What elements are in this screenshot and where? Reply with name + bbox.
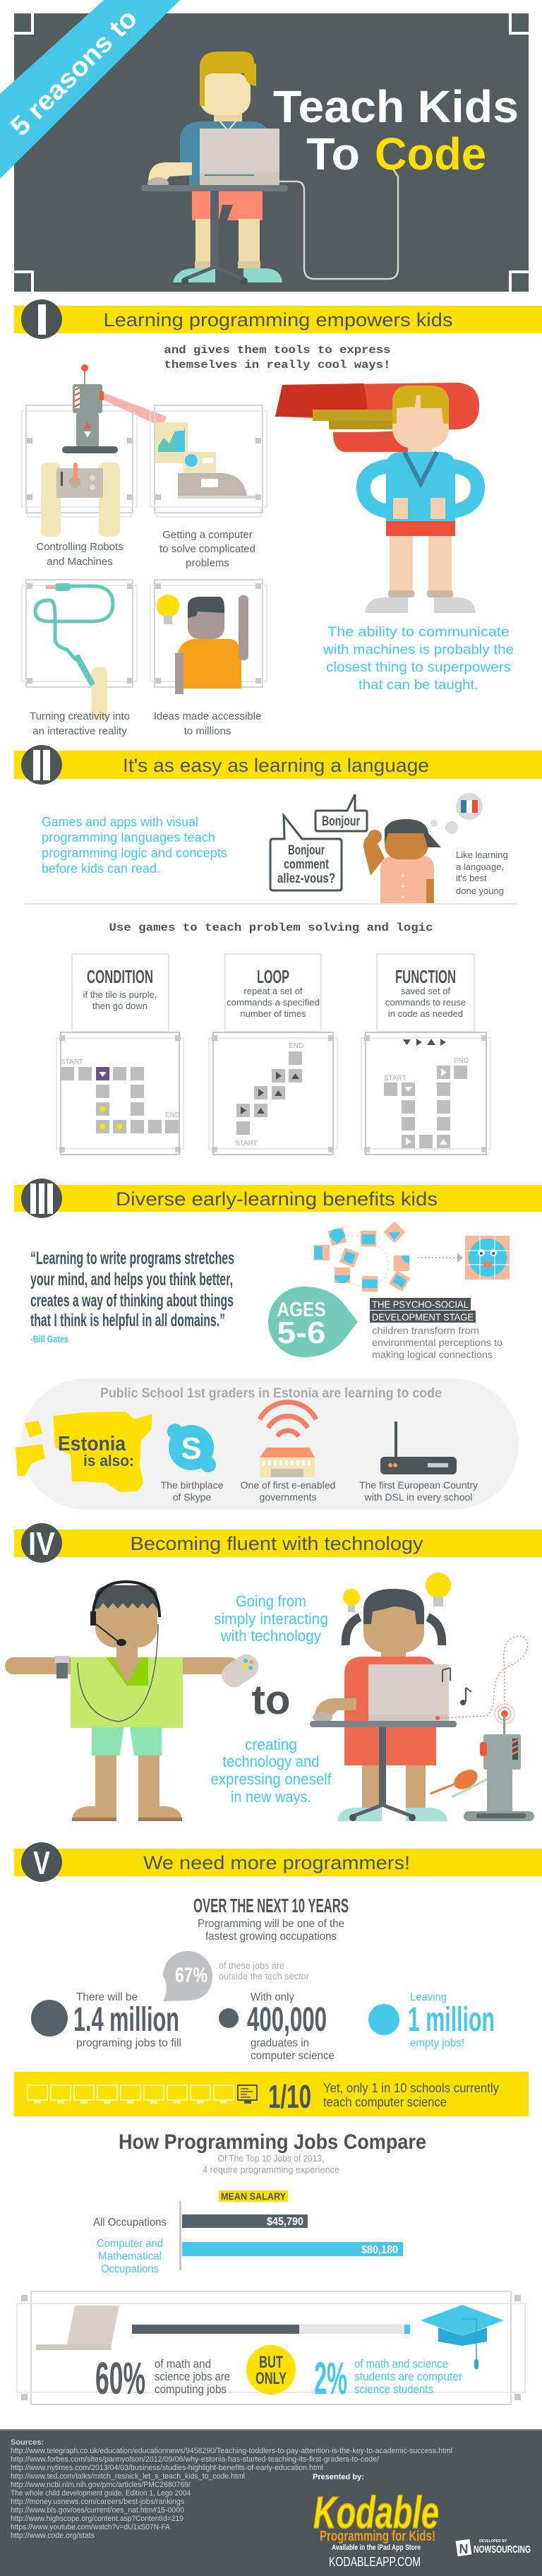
panel: computing jobs vs cs students [17, 2291, 525, 2404]
quote: your mind, and helps you think better, [30, 1270, 233, 1289]
stat: 2%: science students [354, 2383, 433, 2396]
card: function: commands to reuse [385, 997, 466, 1008]
stat: 1 million: 1 million [408, 2001, 495, 2039]
speech bubble: Bonjour comment allez-vous: comment [284, 857, 330, 872]
heading: how programming jobs compare: How Programming Jobs Compare [119, 2130, 426, 2154]
section II header [14, 745, 542, 785]
panel: estonia: governments [260, 1491, 316, 1503]
subtitle: and gives them tools to express [164, 344, 391, 357]
quote: “Learning to write programs stretches [30, 1248, 234, 1268]
sources list: http://money.usnews.com/careers/best-jobs/rankings [11, 2498, 184, 2506]
stat: 60%: of math and [155, 2357, 211, 2371]
sources list: http://www.ncbi.nlm.nih.gov/pmc/articles/PMC2680769/ [11, 2481, 191, 2489]
visual languages text: before kids can read. [42, 861, 160, 876]
logo: kodable: KODABLEAPP.COM [329, 2555, 421, 2569]
section IV header [14, 1523, 542, 1563]
section II header: It's as easy as learning a language [123, 755, 429, 776]
card: loop: commands a specified [227, 997, 320, 1008]
band: 1 in 10 schools: Yet, only 1 in 10 schools currently [323, 2081, 499, 2095]
caption: ideas: Ideas made accessible [154, 710, 261, 722]
sources list: https://www.youtube.com/watch?v=dU1xS07N-FA [11, 2523, 171, 2532]
stat: 400,000: computer science [251, 2050, 335, 2062]
panel: estonia [16, 1378, 519, 1510]
panel: estonia: The birthplace [161, 1479, 224, 1491]
psycho-social development stage: children transform from [372, 1325, 479, 1336]
stat: 2%: students are computer [354, 2370, 462, 2383]
subtitle: themselves in really cool ways! [164, 359, 391, 371]
card: condition: then go down [92, 1001, 147, 1011]
over the next 10 years: Programming will be one of the [198, 1918, 344, 1930]
section IV content [5, 1573, 534, 1821]
tile: ideas accessible [150, 580, 267, 694]
map: estonia: Estonia [58, 1433, 126, 1455]
creating technology text: in new ways. [231, 1788, 311, 1806]
quote [30, 1248, 234, 1344]
band: 1 in 10 schools [14, 2072, 529, 2116]
creating technology text: expressing oneself [210, 1770, 332, 1788]
icon: skype: S [181, 1431, 202, 1466]
map: estonia [16, 1412, 152, 1492]
caption: computer: problems [186, 557, 229, 569]
section I header: Learning programming empowers kids [103, 309, 453, 330]
creating technology text [210, 1736, 332, 1806]
caption: ideas: to millions [184, 725, 231, 737]
superpowers text: with machines is probably the [323, 643, 514, 657]
card: loop: repeat a set of [243, 986, 303, 996]
dark background frame [14, 13, 529, 292]
icon: laptop [36, 2306, 119, 2350]
logo: kodable: Programming for Kids! [320, 2529, 435, 2544]
logo: nowsourcing: N [459, 2542, 469, 2556]
section III content [16, 1222, 519, 1510]
psycho-social development stage: DEVELOPMENT STAGE [372, 1311, 474, 1323]
panel: estonia: with DSL in every school [364, 1491, 472, 1503]
games subtitle: Use games to teach problem solving and logic [109, 922, 433, 934]
stat: 1.4 million [31, 1991, 181, 2049]
caption: controlling robots [36, 541, 124, 568]
visual languages text: Games and apps with visual [42, 815, 198, 829]
stat: 2%: 2% [314, 2353, 347, 2404]
bar chart: mean salary [93, 2190, 403, 2275]
going from text: simply interacting [214, 1610, 328, 1628]
speech bubble: Bonjour comment allez-vous: allez-vous? [277, 871, 335, 886]
quote: that I think is helpful in all domains.” [30, 1311, 225, 1330]
heading: how programming jobs compare [119, 2130, 426, 2175]
stat: 400,000: With only [251, 1991, 294, 2003]
card: function [361, 954, 490, 1155]
stat: 60%: 60% [95, 2353, 145, 2404]
girl thinking illustration [363, 819, 458, 903]
icon: router [380, 1421, 457, 1474]
bar chart: mean salary: Computer and [97, 2238, 163, 2250]
panel: estonia: The first European Country [359, 1479, 478, 1491]
creating technology text: creating [245, 1736, 297, 1753]
section V header: V [33, 1844, 50, 1881]
card: loop [209, 954, 337, 1155]
caption: creativity: Turning creativity into [30, 710, 130, 722]
hero panel [0, 0, 529, 292]
quote: creates a way of thinking about things [30, 1291, 234, 1311]
going from text [214, 1592, 328, 1645]
caption: creativity [30, 710, 130, 737]
sources list: http://www.nytimes.com/2013/04/03/business/studies-highlight-benefits-of-early-education.html [11, 2464, 323, 2472]
speech bubble: Bonjour [315, 794, 367, 831]
bar chart: mean salary: Occupations [101, 2263, 159, 2275]
badge: but only: BUT [259, 2353, 283, 2372]
card: condition: START [61, 1059, 83, 1066]
sources list: http://www.code.org/stats [11, 2532, 95, 2540]
67% drop: of these jobs are [219, 1960, 284, 1971]
card: loop: END [289, 1042, 303, 1050]
card: condition: END [165, 1111, 180, 1119]
badge: but only: ONLY [255, 2369, 287, 2388]
heading: how programming jobs compare: 4 require programming experience [203, 2164, 339, 2175]
girl at laptop with robot [310, 1573, 534, 1821]
title: Teach Kids To Code: Code [375, 129, 486, 179]
card: function: FUNCTION [395, 966, 456, 987]
like learning a language text: a language, [456, 861, 504, 872]
going from text: with technology [220, 1627, 321, 1645]
section V content [14, 1895, 529, 2405]
speech bubble: Bonjour comment allez-vous: Bonjour [288, 843, 325, 858]
stat: 1 million [368, 1991, 495, 2049]
creating technology text: technology and [223, 1753, 319, 1770]
stat: 60% [95, 2353, 230, 2404]
card: loop: START [235, 1140, 258, 1147]
superpowers text: closest thing to superpowers [326, 660, 511, 675]
panel: estonia: Public School 1st graders in Estonia are learning to code [100, 1386, 442, 1401]
progress bar [132, 2325, 410, 2334]
sources list: http://www.highscope.org/content.asp?ContentId=219 [11, 2515, 183, 2523]
badge: but only [246, 2345, 296, 2395]
card: function: in code as needed [388, 1008, 463, 1019]
tile: creativity [22, 580, 137, 720]
band: 1 in 10 schools: 1/10 [268, 2078, 311, 2115]
to: to [251, 1677, 291, 1723]
section I header [14, 299, 542, 339]
sources list [11, 2438, 452, 2540]
logo: nowsourcing: DEVELOPED BY [479, 2539, 507, 2544]
superpowers text: The ability to communicate [327, 625, 510, 640]
ages 5-6 badge [268, 1287, 358, 1357]
stat: 1.4 million: 1.4 million [73, 2001, 179, 2039]
tile: computer solving problems [150, 405, 267, 517]
stat: 60%: computing jobs [155, 2383, 227, 2396]
icon: game controller [217, 1650, 263, 1692]
tile: controlling robots [22, 364, 167, 537]
heading: how programming jobs compare: Of The Top 10 Jobs of 2013, [217, 2153, 325, 2164]
icon: skype [167, 1424, 216, 1472]
section I content [21, 344, 514, 737]
stat: 1.4 million: There will be [76, 1991, 138, 2003]
sources list: http://www.telegraph.co.uk/education/educationnews/9458290/Teaching-toddlers-to-pay-attention-is-the-key-to-academic-success.html [11, 2447, 452, 2455]
stat: 400,000: 400,000 [247, 2001, 327, 2039]
stat: 400,000 [219, 1991, 335, 2062]
quote: -Bill Gates [30, 1333, 68, 1344]
over the next 10 years [193, 1895, 349, 1943]
like learning a language text [456, 849, 508, 896]
section IV header: Becoming fluent with technology [130, 1533, 423, 1554]
sources list: http://www.forbes.com/sites/parmyolson/2012/09/06/why-estonia-has-started-teaching-its-first-graders-to-code/ [11, 2455, 380, 2464]
67% drop: outside the tech sector [219, 1971, 310, 1981]
boy with headset [5, 1582, 239, 1821]
visual languages text: programming logic and concepts [42, 846, 227, 860]
bar chart: mean salary: $45,790 [267, 2216, 303, 2228]
logo: kodable: Presented by: [313, 2473, 364, 2481]
card: loop: number of times [240, 1008, 306, 1019]
stat: 1.4 million: programing jobs to fill [76, 2037, 181, 2049]
icon: e-government building [260, 1402, 316, 1477]
stat: 60%: science jobs are [155, 2370, 230, 2383]
icon: french flag [456, 793, 483, 820]
sources list: http://www.ted.com/talks/mitch_resnick_let_s_teach_kids_to_code.html [11, 2472, 245, 2481]
psycho-social development stage: environmental perceptions to [372, 1337, 502, 1348]
section V header: We need more programmers! [143, 1852, 410, 1873]
visual languages text: programming languages teach [42, 830, 215, 845]
like learning a language text: done young [456, 886, 504, 896]
caption: computer [159, 529, 255, 569]
sources list: http://www.bls.gov/oes/current/oes_nat.htm#15-0000 [11, 2506, 184, 2515]
psycho-social development stage: making logical connections [372, 1349, 493, 1360]
ribbon: 5 reasons to [0, 0, 180, 179]
caption: controlling robots: and Machines [47, 556, 113, 568]
section II content [24, 793, 518, 1155]
card: function: saved set of [401, 986, 450, 996]
card: condition [56, 954, 183, 1155]
going from text: Going from [236, 1592, 306, 1610]
bar chart: mean salary: MEAN SALARY [221, 2190, 287, 2202]
caption: controlling robots: Controlling Robots [36, 541, 124, 553]
card: function: END [454, 1057, 469, 1065]
67% drop: 67% [175, 1964, 207, 1987]
logo: kodable [313, 2473, 439, 2569]
card: condition: if the tile is purple, [83, 989, 157, 1000]
section V header [14, 1842, 542, 1882]
logo: kodable: Kodable [313, 2487, 439, 2538]
card: condition: CONDITION [87, 966, 153, 987]
psycho-social development stage: THE PSYCHO-SOCIAL [372, 1299, 469, 1310]
title: Teach Kids To Code: Teach Kids [273, 81, 519, 132]
stat: 1 million: empty jobs! [410, 2037, 464, 2049]
caption: computer: to solve complicated [159, 543, 255, 555]
caption: creativity: an interactive reality [32, 725, 127, 737]
over the next 10 years: fastest growing occupations [205, 1931, 337, 1943]
67% drop [163, 1951, 310, 2001]
caption: ideas [154, 710, 261, 737]
section IV header: IV [28, 1525, 55, 1562]
stat: 1 million: Leaving [410, 1991, 447, 2003]
superpowers text [323, 625, 514, 693]
footer [0, 2429, 542, 2576]
like learning a language text: it's best [456, 873, 487, 883]
section III header [14, 1179, 542, 1218]
like learning a language text: Like learning [456, 849, 508, 860]
panel: estonia: of Skype [173, 1491, 211, 1503]
ages 5-6 badge: AGES [277, 1299, 326, 1321]
ribbon: 5 reasons to: 5 reasons to [5, 4, 143, 142]
stat: 2% [314, 2353, 462, 2404]
ages 5-6 badge: 5-6 [277, 1316, 326, 1350]
band: 1 in 10 schools: teach computer science [323, 2095, 447, 2109]
cable [279, 168, 398, 279]
card: loop: LOOP [257, 966, 289, 987]
subtitle [164, 344, 391, 371]
boy at laptop illustration [141, 52, 288, 285]
speech bubble: Bonjour: Bonjour [322, 814, 360, 829]
over the next 10 years: OVER THE NEXT 10 YEARS [193, 1895, 349, 1916]
card: function: START [384, 1075, 406, 1083]
superhero girl [275, 383, 479, 613]
logo: nowsourcing [456, 2539, 531, 2556]
logo: kodable: Available in the iPad App Store [332, 2544, 421, 2552]
psycho-social development stage [370, 1298, 502, 1360]
bar chart: mean salary: $80,180 [361, 2244, 398, 2256]
title: Teach Kids To Code [273, 81, 519, 179]
bar chart: mean salary: All Occupations [93, 2217, 167, 2229]
section III header: Diverse early-learning benefits kids [116, 1188, 438, 1210]
icon: graduation cap [421, 2305, 504, 2369]
speech bubble: Bonjour comment allez-vous [270, 816, 342, 890]
puzzle pieces illustration [314, 1221, 510, 1292]
visual languages text [42, 815, 227, 876]
map: estonia: is also: [83, 1452, 134, 1469]
caption: computer: Getting a computer [162, 529, 253, 541]
sources list: The whole child development guide, Edition 1, Lego 2004 [11, 2489, 191, 2498]
stat: 400,000: graduates in [251, 2037, 309, 2049]
panel: estonia: One of first e-enabled [241, 1479, 335, 1491]
stat: 2%: of math and science [354, 2357, 448, 2371]
bar chart: mean salary: Mathematical [98, 2250, 162, 2262]
title: Teach Kids To Code: To [306, 129, 360, 179]
superpowers text: that can be taught. [359, 678, 478, 693]
sources list: Sources: [11, 2438, 44, 2447]
